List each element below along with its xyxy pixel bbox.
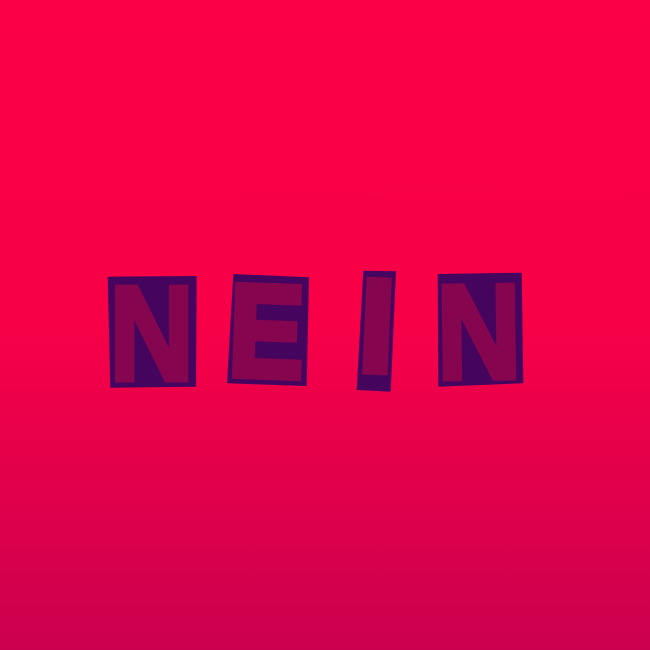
letter tile: N: N [109,257,194,409]
word: NEIN [108,250,523,409]
letter tile: E: E [226,256,307,406]
letter tile: I: I [354,250,400,403]
letter tile: N: N [435,255,522,408]
